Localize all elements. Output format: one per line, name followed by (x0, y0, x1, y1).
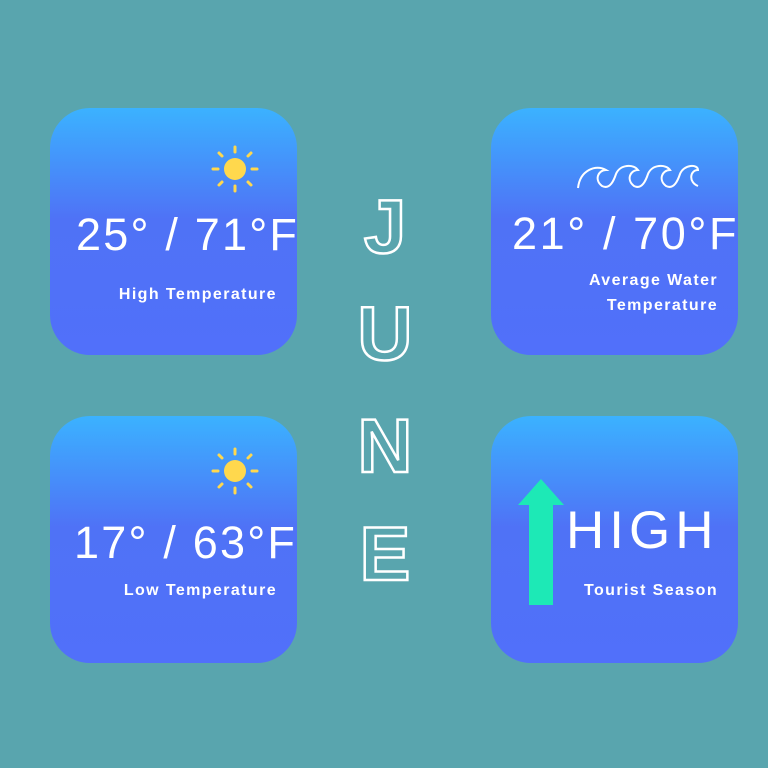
value: 17° / 63°F (74, 517, 297, 568)
icon: up arrow (518, 479, 564, 605)
value: 25° / 71°F (76, 209, 299, 260)
label: Average Water (589, 272, 718, 289)
value: HIGH (566, 501, 718, 560)
icon: sun (212, 146, 258, 192)
panel: low temperature (50, 416, 297, 663)
label (589, 272, 718, 314)
icon: sun (212, 448, 258, 494)
icon: waves (577, 164, 699, 188)
title: JUNE vertical (360, 199, 409, 582)
panel: tourist season (491, 416, 738, 663)
label: High Temperature (119, 286, 277, 303)
label: Tourist Season (584, 582, 718, 599)
panel: water temperature (491, 108, 738, 355)
label: Low Temperature (124, 582, 277, 599)
panel: high temperature (50, 108, 297, 355)
label: Temperature (607, 297, 718, 314)
value: 21° / 70°F (512, 208, 739, 259)
